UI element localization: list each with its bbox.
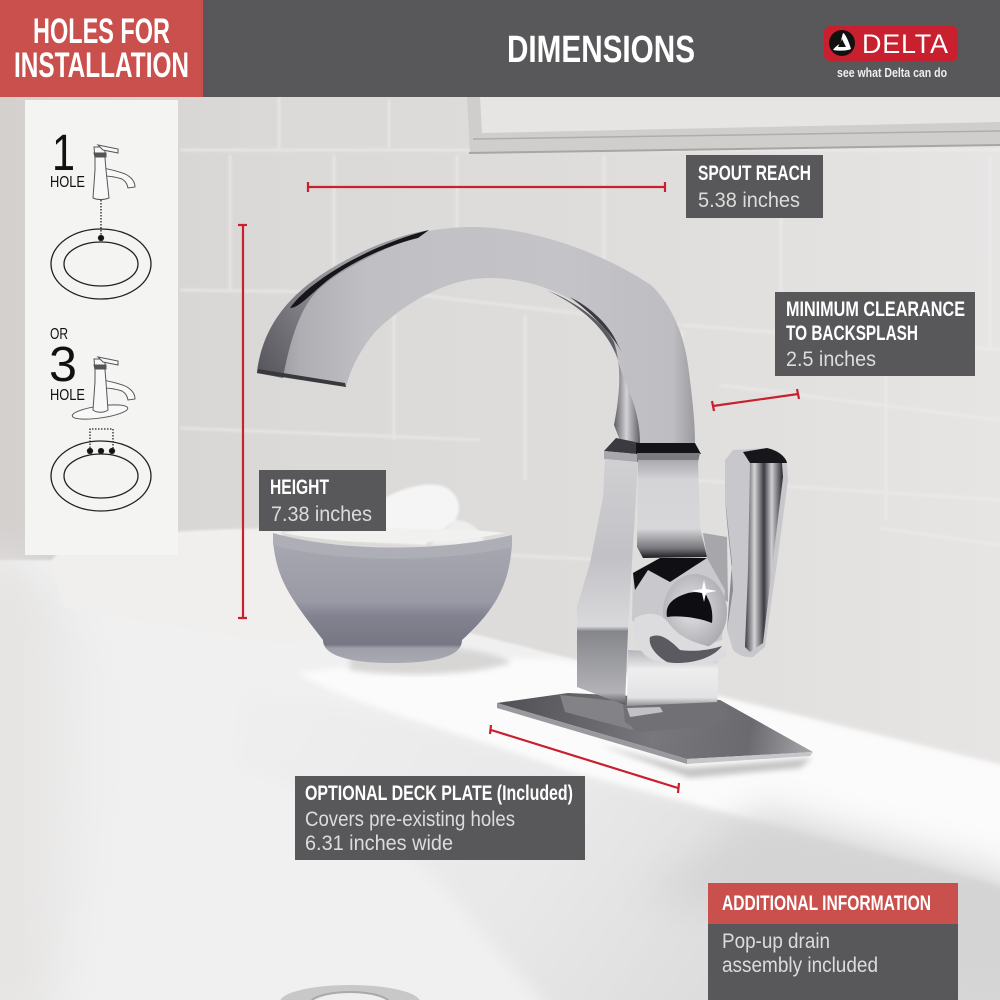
towel [51,528,319,643]
sink drain [280,985,420,1000]
red heading panel: holes for installation: INSTALLATION [14,46,189,85]
soap [340,485,485,545]
callout: spout reach [686,155,823,218]
callout: height [259,470,386,531]
plate shadow [600,745,812,778]
number three hole label: OR [50,326,68,343]
callout: spout reach: SPOUT REACH [698,162,811,185]
dimension line: backsplash clearance [712,389,799,411]
number three hole label: HOLE [50,387,85,404]
panel: additional information: ADDITIONAL INFORMATION [722,892,931,915]
callout: minimum clearance: 2.5 inches [786,348,876,371]
deck plate [497,693,813,764]
callout: minimum clearance [775,292,975,376]
body right face [637,460,707,558]
number one hole label: 1 [52,124,75,181]
dimension line: spout reach [308,182,665,192]
dimension line: height [238,225,247,618]
dimension line: deck plate [490,725,679,793]
panel: additional information: assembly included [722,954,878,977]
number three hole label: 3 [49,338,77,392]
spout [257,227,695,443]
number three hole label [49,326,85,404]
callout: height: HEIGHT [270,476,329,499]
collar [604,438,701,462]
callout: optional deck plate: 6.31 inches wide [305,832,453,855]
icon: three hole faucet with plate [71,357,135,422]
body left face [577,459,638,705]
faucet with deck plate [257,227,813,778]
delta logo: DELTA [862,29,948,59]
callout: optional deck plate: Covers pre-existing holes [305,808,515,831]
handle [725,448,788,657]
panel: additional information [708,883,958,1000]
callout: spout reach: 5.38 inches [698,189,800,212]
bowl [273,528,512,674]
bracket [703,533,728,602]
sparkle [691,580,717,602]
icon: three hole sink [51,429,151,511]
delta logo [824,26,958,80]
icon: single hole sink [51,200,151,299]
red heading panel: holes for installation [0,0,203,97]
base [627,650,718,706]
number one hole label: HOLE [50,174,85,191]
chrome ball [632,558,727,665]
red heading panel: holes for installation: HOLES FOR [33,12,170,51]
mirror frame [467,97,1000,153]
icon: single hole faucet [93,145,135,200]
heading: dimensions: DIMENSIONS [507,29,695,71]
callout: optional deck plate: OPTIONAL DECK PLATE (Included) [305,782,573,805]
callout: height: 7.38 inches [271,503,372,526]
panel: hole diagrams [25,100,178,555]
callout: optional deck plate [295,776,585,860]
number one hole label [50,124,85,191]
panel: additional information: Pop-up drain [722,930,830,953]
delta logo: see what Delta can do [837,65,947,80]
callout: minimum clearance: TO BACKSPLASH [786,322,918,345]
header bar [203,0,1000,97]
